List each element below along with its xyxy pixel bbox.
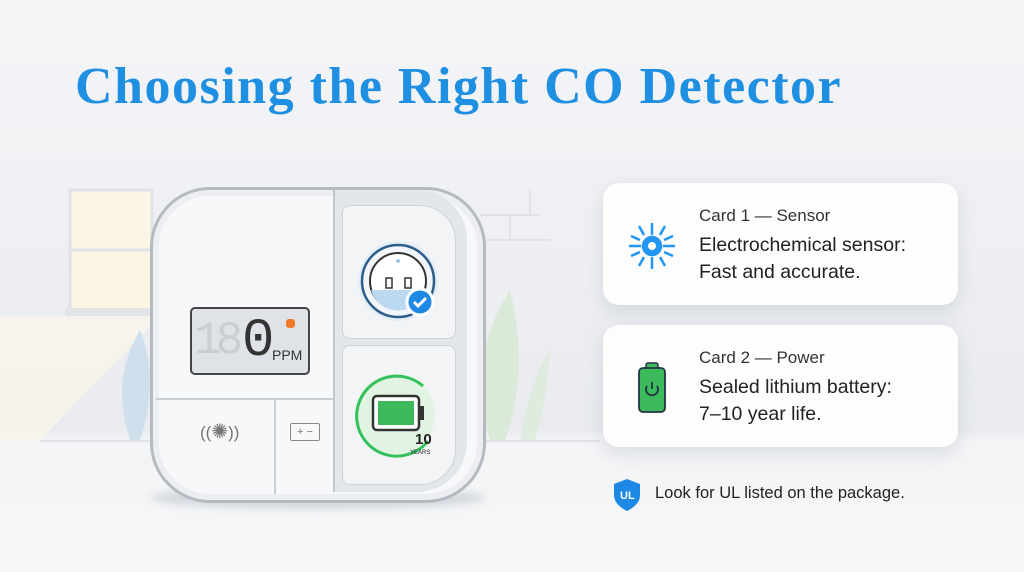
icon: 10 year battery panel: YEARS xyxy=(410,450,430,456)
card 2 text: Card 2 — Power xyxy=(699,348,825,367)
UL note: Look for UL listed on the package. xyxy=(655,484,905,502)
LCD display: 0 xyxy=(242,311,274,372)
device: CO detector xyxy=(150,187,486,512)
icon: battery button: + − xyxy=(297,426,313,438)
card 2: power: 7–10 year life. xyxy=(699,403,822,425)
icon: UL shield xyxy=(614,479,640,511)
card 1: sensor xyxy=(603,183,958,305)
LCD display: PPM xyxy=(272,347,302,363)
icon: 10 year battery panel: 10 xyxy=(415,431,432,448)
title: Choosing the Right CO Detector xyxy=(75,58,842,115)
LCD display xyxy=(190,307,310,375)
card 1: sensor: Electrochemical sensor: xyxy=(699,234,906,256)
right column xyxy=(333,190,467,492)
icon: sensor xyxy=(629,223,675,269)
icon: 10 year battery panel xyxy=(342,345,456,485)
icon: UL shield: UL xyxy=(620,490,635,502)
card 1 text: Card 1 — Sensor xyxy=(699,206,830,225)
card 2: power xyxy=(603,325,958,447)
icon: alarm sound: ((✺)) xyxy=(200,421,239,443)
LCD display: 18 xyxy=(194,315,237,367)
card 2: power: Sealed lithium battery: xyxy=(699,376,892,398)
UL note xyxy=(614,479,905,511)
bottom buttons xyxy=(156,398,333,400)
icon: battery button xyxy=(290,423,320,441)
icon: battery xyxy=(638,362,666,413)
card 1: sensor: Fast and accurate. xyxy=(699,261,861,283)
icon: sensor panel xyxy=(342,205,456,339)
